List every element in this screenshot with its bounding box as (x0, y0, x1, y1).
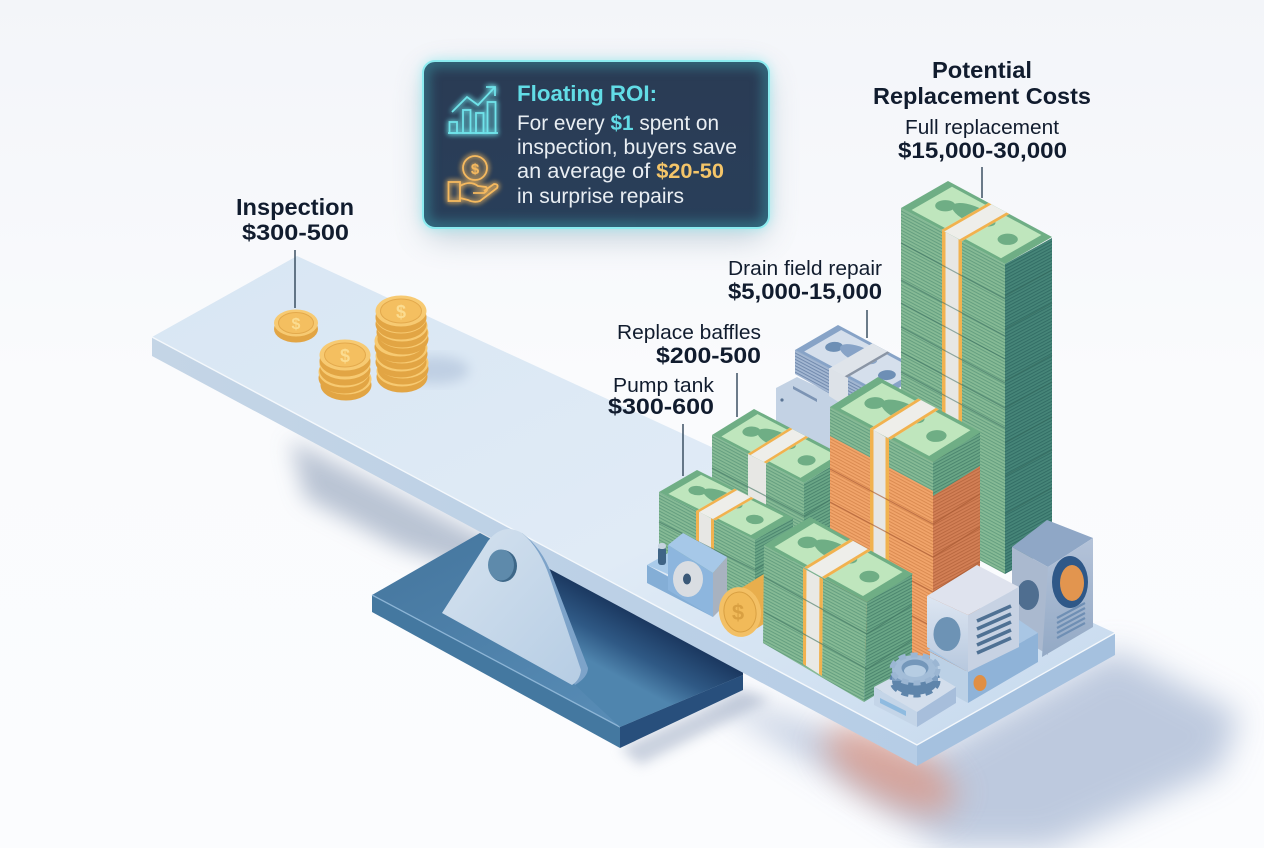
stack seams (764, 577, 912, 669)
gear block (874, 655, 956, 727)
label: full replacement: $15,000-30,000 (898, 138, 1067, 163)
dark underside shadow (535, 555, 743, 727)
strap down the stack (942, 230, 962, 520)
machine base (927, 620, 1038, 703)
drain field repair stack (795, 325, 926, 424)
tall machine (1012, 520, 1093, 657)
label: drain field repair: $5,000-15,000 (728, 279, 882, 304)
callout body text: in surprise repairs (517, 185, 684, 208)
label: full replacement (898, 117, 1067, 198)
tall coin stack: $ (396, 302, 406, 322)
label: full replacement: Full replacement (905, 117, 1059, 139)
small coin stack (318, 340, 372, 400)
label: inspection: Inspection (236, 194, 354, 220)
callout body text: an average of $20-50 (517, 160, 724, 183)
front stack (763, 517, 913, 702)
heading: potential replacement costs: Potential (932, 57, 1032, 83)
inspection coins (274, 296, 469, 400)
label: drain field repair: Drain field repair (728, 258, 882, 280)
label: replace baffles (617, 322, 761, 417)
label: pump tank: $300-600 (608, 394, 714, 419)
middle stack: orange and green (830, 377, 981, 692)
callout body text: For every $1 spent on (517, 112, 719, 135)
gear (892, 655, 938, 695)
small coin stack: $ (340, 346, 350, 366)
callout body text: inspection, buyers save (517, 136, 737, 159)
connector (1017, 580, 1039, 610)
heading: potential replacement costs: Replacement Costs (873, 83, 1091, 109)
label: inspection (236, 194, 354, 308)
callout body text (517, 112, 737, 208)
pump tank stack (659, 470, 793, 610)
label: inspection: $300-500 (242, 220, 349, 245)
vents (977, 606, 1011, 653)
label: pump tank (608, 375, 715, 476)
label: drain field repair (728, 258, 882, 338)
fulcrum (442, 529, 588, 685)
callout title: Floating ROI: (517, 81, 657, 106)
label: replace baffles: $200-500 (656, 343, 761, 368)
label: pump tank: Pump tank (613, 375, 715, 397)
equipment box behind stacks (776, 377, 845, 470)
icon: hand with coin: $ (471, 161, 480, 178)
icon: hand with coin (448, 156, 498, 202)
callout: floating ROI (423, 61, 769, 237)
stack seams (830, 469, 980, 627)
pump machine (647, 533, 727, 617)
stack seams (901, 243, 1052, 514)
cube machine (927, 565, 1019, 672)
vents (1057, 603, 1085, 638)
seesaw base (372, 533, 743, 748)
soft shadows on the floor (290, 440, 1240, 848)
side coin: $ (732, 600, 744, 625)
label: replace baffles: Replace baffles (617, 322, 761, 344)
tall coin stack (374, 296, 428, 392)
heading: potential replacement costs (873, 57, 1091, 109)
single coin: $ (292, 316, 301, 333)
seesaw plank (152, 256, 1115, 766)
side coin (716, 574, 770, 640)
single coin (274, 310, 318, 342)
icon: growth chart (448, 87, 498, 133)
replace baffles stack (712, 409, 846, 560)
tallest stack: full replacement (901, 181, 1052, 574)
